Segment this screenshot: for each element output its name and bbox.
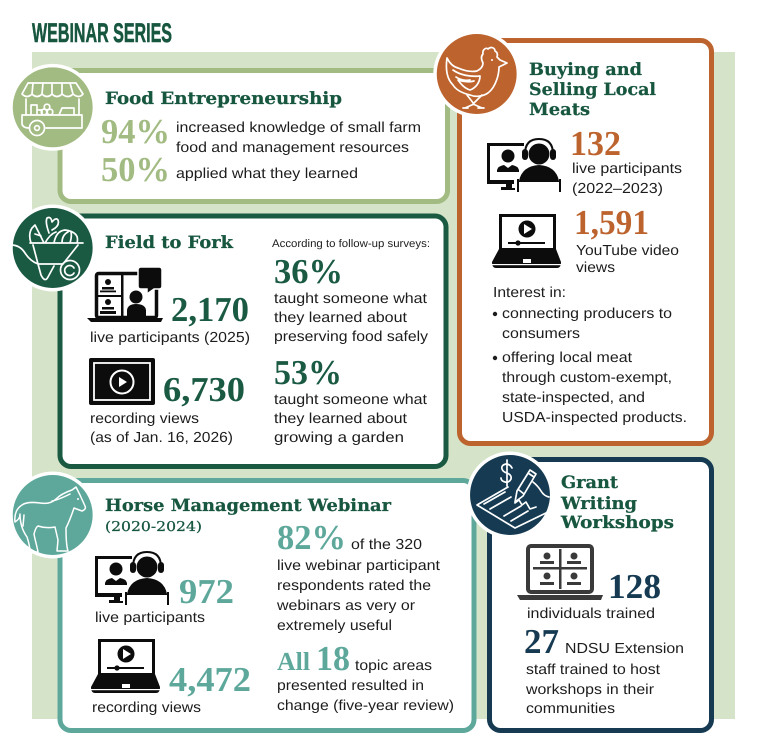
interest list — [493, 285, 687, 426]
stat text: 27: workshops in their — [525, 682, 654, 698]
stat text: 53% — [274, 392, 427, 446]
stat: 132: 132 — [570, 124, 621, 163]
stat text: 53%: growing a garden — [274, 430, 404, 446]
stat text: All 18: topic areas — [355, 658, 432, 674]
interest list: consumers — [502, 326, 580, 342]
stat: 4,472: 4,472 — [169, 660, 251, 699]
stat: All 18: All — [277, 647, 310, 676]
icon: grant writing — [468, 453, 552, 537]
stat: All 18 — [277, 639, 350, 678]
stat: 53%: 53% — [274, 353, 342, 392]
icon: wheelbarrow — [11, 206, 94, 290]
stat text: 82%: of the 320 — [351, 537, 422, 553]
stat text: 27: staff trained to host — [526, 662, 660, 678]
stat: 82%: 82% — [277, 518, 346, 557]
icon: horse — [11, 473, 94, 557]
stat text: 53%: they learned about — [274, 411, 407, 427]
title: WEBINAR SERIES — [32, 18, 172, 48]
icon: headset participant — [95, 552, 168, 605]
icon: laptop with chat — [87, 267, 163, 322]
stat: 128: 128 — [608, 567, 661, 606]
heading: Horse Management Webinar — [105, 496, 392, 516]
icon: market stall — [11, 66, 94, 149]
stat text: 82%: extremely useful — [277, 618, 392, 634]
stat: 972: 972 — [179, 572, 234, 611]
icon: video laptop — [492, 216, 561, 268]
icon: video player — [89, 358, 155, 405]
panel: Field to Fork — [11, 206, 446, 467]
stat: 50%: 50% — [101, 150, 170, 189]
label: recording views: recording views — [90, 411, 199, 427]
panel: Horse Management Webinar — [11, 473, 474, 730]
stat text: 94%: food and management resources — [176, 140, 409, 156]
icon: video laptop — [91, 640, 160, 693]
interest list: offering local meat — [502, 350, 632, 366]
stat: 2,170: 2,170 — [171, 290, 249, 329]
heading: Selling Local — [529, 80, 657, 100]
stat text: 27 — [525, 641, 684, 717]
label: live participants — [572, 161, 682, 197]
stat text: 27: communities — [526, 701, 615, 717]
stat text: 27: NDSU Extension — [565, 641, 684, 657]
stat: 6,730: 6,730 — [163, 370, 245, 409]
stat: 27: 27 — [524, 622, 559, 661]
heading: Grant — [561, 473, 618, 493]
stat: 1,591: 1,591 — [574, 203, 649, 242]
stat text: 36%: preserving food safely — [274, 329, 429, 345]
label: YouTube views: views — [576, 260, 615, 276]
heading — [529, 60, 657, 120]
interest list: through custom-exempt, — [502, 370, 672, 386]
stat text: 82%: respondents rated the — [277, 578, 431, 594]
stat text: 50%: applied what they learned — [176, 166, 358, 182]
heading: Buying and — [529, 60, 642, 80]
stat: 94%: 94% — [101, 112, 170, 151]
icon: laptop video grid — [517, 546, 603, 600]
stat text: 82% — [276, 537, 440, 634]
label: YouTube views: YouTube video — [576, 243, 679, 259]
label: live participants: live participants — [572, 161, 682, 177]
stat text: 82%: webinars as very or — [276, 598, 415, 614]
stat text: 82%: live webinar participant — [277, 558, 440, 574]
icon: headset participant — [487, 139, 560, 192]
panel: Buying and Selling Local Meats — [435, 32, 712, 444]
stat text: 36% — [274, 291, 429, 345]
label: YouTube views — [576, 243, 679, 276]
heading — [560, 473, 674, 533]
stat text: All 18 — [277, 658, 454, 714]
interest list: USDA-inspected products. — [502, 410, 687, 426]
stat text: 36%: they learned about — [274, 310, 407, 326]
heading: Food Entrepreneurship — [105, 89, 342, 109]
survey note: According to follow-up surveys: — [272, 238, 430, 250]
heading: Field to Fork — [105, 233, 234, 253]
stat text: 53%: taught someone what — [274, 392, 427, 408]
label: recording views: recording views — [92, 700, 201, 716]
interest list: Interest in: — [493, 285, 566, 301]
heading: Meats — [529, 100, 590, 120]
interest list: state-inspected, and — [502, 390, 645, 406]
subheading: (2020-2024) — [105, 519, 202, 535]
label: recording views: (as of Jan. 16, 2026) — [90, 430, 233, 446]
stat: All 18: 18 — [316, 639, 350, 678]
label: recording views — [90, 411, 233, 446]
interest list: connecting producers to — [502, 306, 672, 322]
label: live participants: (2022–2023) — [572, 181, 663, 197]
panel: Grant Writing Workshops — [468, 453, 712, 730]
stat text: 36%: taught someone what — [274, 291, 427, 307]
label: live participants: live participants — [95, 610, 205, 626]
icon: chicken — [435, 32, 518, 116]
label: individuals trained: individuals trained — [527, 606, 655, 622]
stat text: All 18: presented resulted in — [277, 678, 424, 694]
stat text: 94%: increased knowledge of small farm — [176, 120, 421, 136]
heading: Workshops — [560, 513, 674, 533]
stat: 36%: 36% — [274, 252, 343, 291]
heading: Writing — [560, 494, 637, 514]
panel: Food Entrepreneurship — [11, 66, 448, 202]
stat text: 94% — [176, 120, 421, 156]
label: live participants: live participants (2025) — [90, 330, 250, 346]
stat text: All 18: change (five-year review) — [277, 698, 454, 714]
